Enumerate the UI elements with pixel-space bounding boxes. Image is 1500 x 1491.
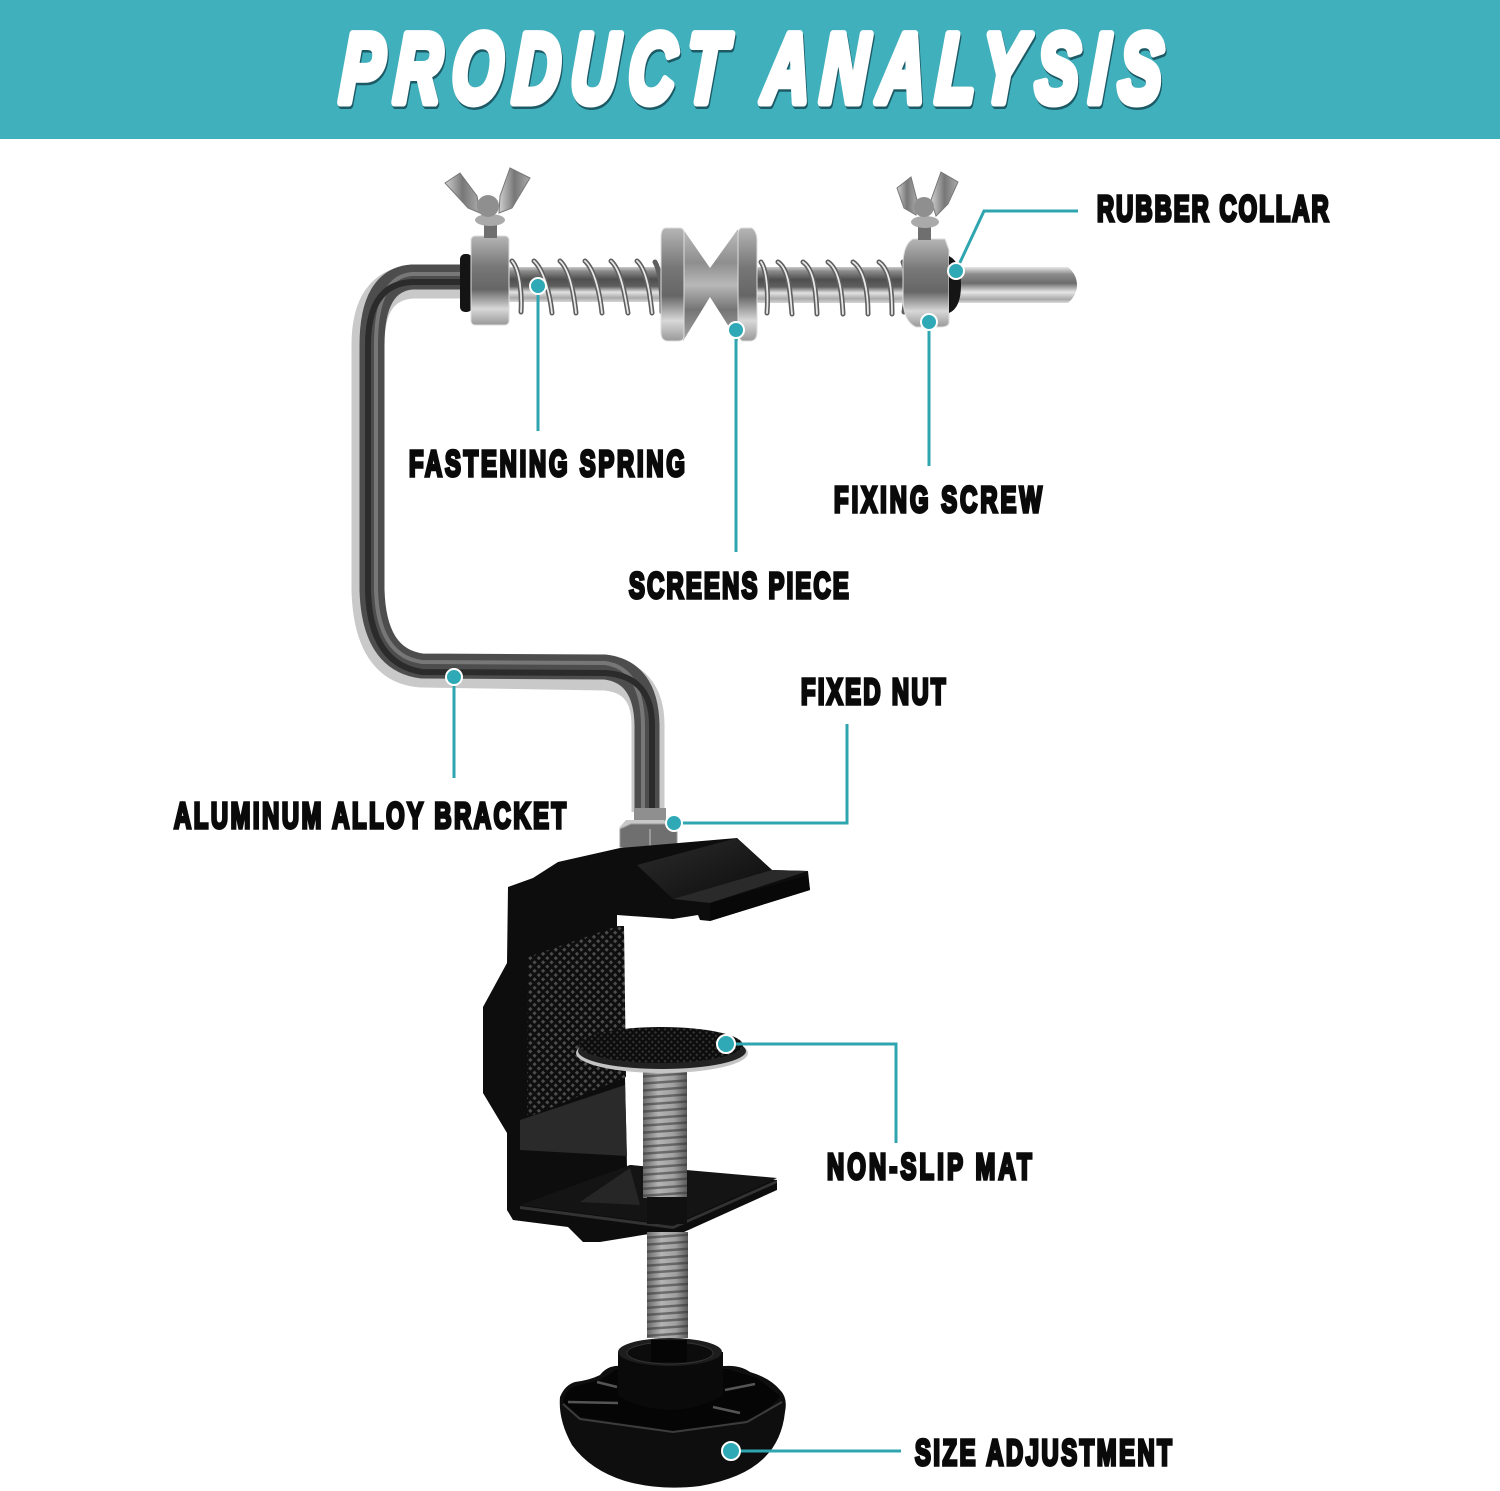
title banner (0, 0, 1500, 139)
right collar block (903, 239, 949, 327)
label: fastening spring: FASTENING SPRING (409, 444, 685, 484)
label: fixed nut: FIXED NUT (801, 672, 946, 712)
right rubber collar (949, 256, 961, 313)
label: aluminum alloy bracket: ALUMINUM ALLOY BRACKET (174, 796, 566, 836)
left collar block (471, 236, 509, 325)
fastening spring left (512, 261, 662, 313)
top plate flange (673, 870, 808, 903)
label: size adjustment: SIZE ADJUSTMENT (915, 1433, 1172, 1473)
screens piece (661, 228, 757, 341)
left wing nut (445, 168, 530, 238)
left rubber collar (460, 254, 472, 312)
clamp body (483, 838, 810, 1242)
screw thread upper (643, 1070, 687, 1224)
back panel sheen (520, 1085, 627, 1156)
adjustment knob (560, 1338, 786, 1488)
horizontal shaft (470, 267, 1077, 303)
non-slip mat disc (576, 1027, 748, 1073)
label: screens piece: SCREENS PIECE (629, 566, 849, 606)
product: spool holder (368, 168, 1077, 1488)
title: PRODUCT ANALYSIS (338, 14, 1165, 123)
aluminum bracket rod (368, 274, 652, 812)
knob hub (618, 1352, 723, 1410)
label: fixing screw: FIXING SCREW (834, 480, 1042, 520)
knurled grip (527, 926, 626, 1115)
label: non-slip mat: NON-SLIP MAT (827, 1147, 1032, 1187)
title: PRODUCT ANALYSIS (339, 16, 1166, 126)
screw thread lower (647, 1232, 688, 1338)
fastening spring right (761, 262, 906, 314)
lower plate (520, 1165, 777, 1225)
right wing nut (897, 172, 958, 240)
callout dots (446, 263, 964, 1460)
fixed nut (619, 808, 677, 851)
top plate facet (637, 838, 772, 899)
callout lines (454, 211, 1078, 1451)
label: rubber collar: RUBBER COLLAR (1097, 189, 1329, 229)
